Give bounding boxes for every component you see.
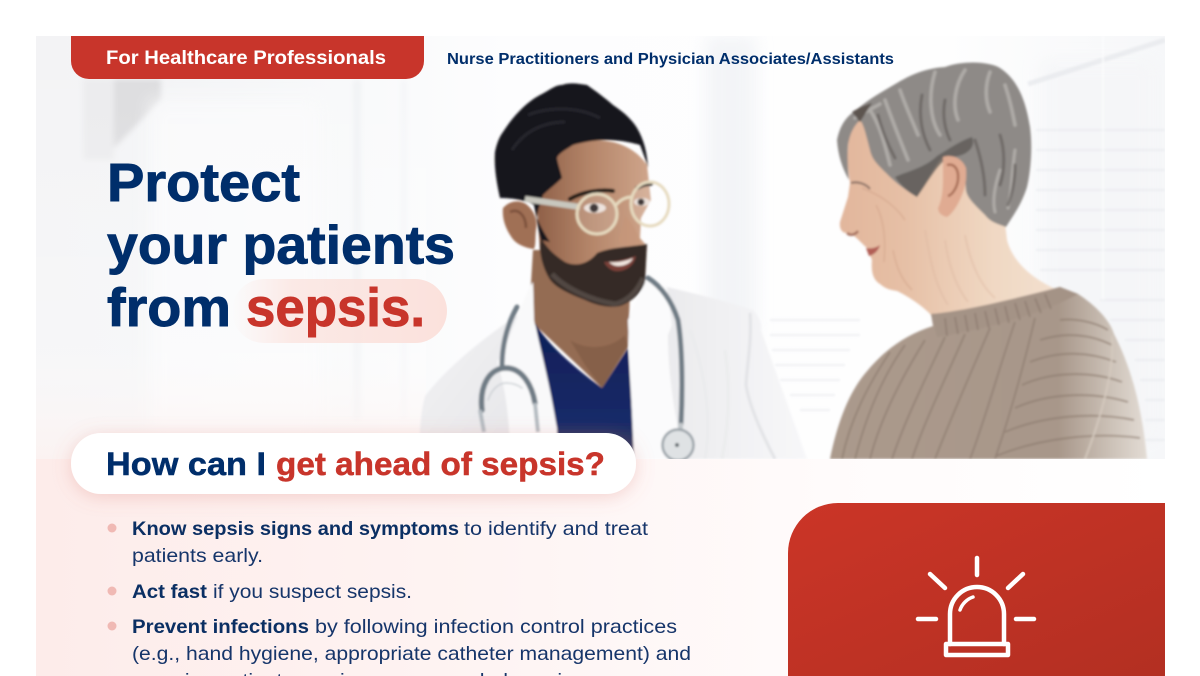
doctor glasses bbox=[525, 182, 669, 234]
doctor ear bbox=[503, 201, 537, 249]
icon: alarm siren bbox=[918, 558, 1034, 655]
bullet: act fast: Act fast bbox=[132, 581, 208, 603]
title: your patients bbox=[107, 216, 455, 276]
red callout panel bbox=[788, 503, 1165, 676]
bullet: know signs: Know sepsis signs and symptoms bbox=[132, 518, 459, 540]
doctor beard bbox=[540, 238, 647, 307]
audience tab bbox=[71, 36, 424, 79]
title: from bbox=[107, 278, 231, 338]
bullet: know signs: patients early. bbox=[132, 545, 263, 567]
doctor face bbox=[536, 138, 652, 266]
doctor neck bbox=[530, 250, 640, 388]
lower pink panel bbox=[36, 459, 1165, 676]
patient hair bbox=[837, 63, 1031, 227]
patient ear bbox=[938, 156, 966, 217]
bullet: act fast bbox=[108, 581, 412, 603]
bullet: prevent infections bbox=[108, 616, 691, 676]
doctor hair bbox=[495, 83, 648, 242]
bullet: know signs bbox=[108, 518, 649, 567]
title: sepsis. bbox=[246, 278, 425, 338]
bullet: prevent infections: (e.g., hand hygiene, appropriate catheter management) and bbox=[132, 643, 691, 665]
patient hair shadow bbox=[895, 137, 973, 197]
doctor coat bbox=[420, 317, 544, 433]
heading pill: How can I bbox=[106, 446, 266, 482]
bullet: act fast: if you suspect sepsis. bbox=[213, 581, 412, 603]
hero photo background bbox=[36, 36, 1165, 460]
doctor stethoscope bbox=[482, 278, 682, 424]
heading pill: get ahead of sepsis? bbox=[276, 446, 605, 482]
doctor scrubs bbox=[535, 323, 640, 459]
patient hair strands bbox=[855, 70, 1015, 212]
patient neck and face bbox=[838, 120, 1054, 316]
patient sweater bbox=[830, 287, 1147, 459]
bullet list bbox=[108, 518, 691, 676]
heading pill bbox=[71, 433, 636, 494]
photo: patient bbox=[830, 63, 1147, 459]
patient face details bbox=[851, 182, 870, 189]
title bbox=[107, 153, 455, 343]
doctor eyes and brows bbox=[570, 184, 651, 199]
highlight pill bbox=[232, 279, 447, 343]
bullet: know signs: to identify and treat bbox=[464, 518, 649, 540]
audience tab: For Healthcare Professionals bbox=[106, 47, 386, 69]
bullet: prevent infections: Prevent infections bbox=[132, 616, 309, 638]
bullet: prevent infections: by following infection control practices bbox=[315, 616, 677, 638]
audience subtitle: Nurse Practitioners and Physician Associates/Assistants bbox=[447, 51, 894, 68]
title: Protect bbox=[107, 153, 300, 213]
photo: doctor bbox=[420, 83, 807, 461]
